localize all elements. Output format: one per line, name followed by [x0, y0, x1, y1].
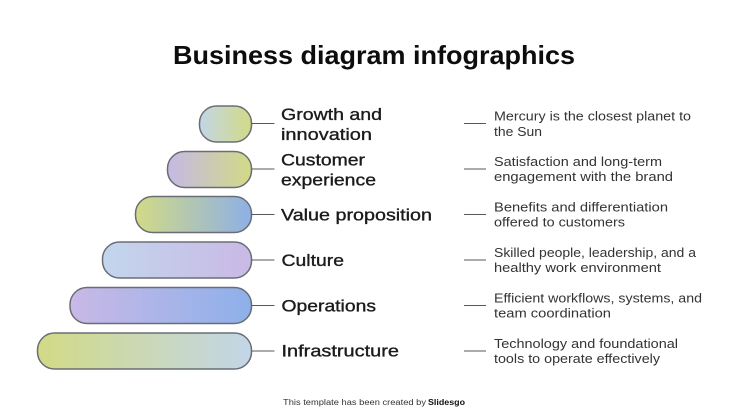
description: growth: Mercury is the closest planet to — [494, 109, 691, 124]
description: growth: the Sun — [494, 124, 542, 139]
label: customer experience: Customer — [281, 150, 365, 170]
connector: infrastructure label to description — [464, 350, 486, 352]
connector: infrastructure pill to label — [252, 350, 274, 352]
pill: culture — [102, 242, 252, 278]
connector: culture pill to label — [252, 259, 274, 261]
footer credit — [283, 398, 465, 407]
label: value proposition: Value proposition — [281, 206, 432, 224]
description: customer: Satisfaction and long-term — [494, 154, 662, 169]
pill: operations — [70, 288, 252, 324]
description: infrastructure: Technology and foundational — [494, 336, 678, 351]
label: customer experience — [281, 150, 376, 190]
title: Business diagram infographics — [173, 40, 575, 70]
pill: value proposition — [136, 196, 252, 232]
row: customer experience — [168, 150, 673, 190]
description: culture: Skilled people, leadership, and a — [494, 245, 697, 260]
connector: operations label to description — [464, 304, 486, 306]
description: culture: healthy work environment — [494, 260, 661, 275]
connector: growth pill to label — [252, 122, 274, 124]
footer credit: This template has been created by — [283, 398, 426, 407]
label: operations: Operations — [282, 296, 376, 315]
row: operations — [70, 288, 702, 324]
description: growth — [494, 109, 691, 139]
pill: growth and innovation — [200, 106, 252, 142]
row: infrastructure — [38, 333, 678, 369]
label: customer experience: experience — [281, 170, 376, 190]
description: operations: team coordination — [494, 305, 611, 320]
description: value: Benefits and differentiation — [494, 200, 668, 215]
description: value: offered to customers — [494, 215, 626, 230]
row: growth and innovation — [200, 105, 691, 144]
description: value — [494, 200, 668, 230]
description: operations: Efficient workflows, systems, and — [494, 290, 702, 305]
label: growth and innovation: innovation — [281, 125, 372, 144]
description: infrastructure: tools to operate effectively — [494, 351, 661, 366]
row: culture — [102, 242, 697, 278]
label: growth and innovation — [281, 105, 382, 144]
description: operations — [494, 290, 702, 320]
connector: operations pill to label — [252, 304, 274, 306]
connector: culture label to description — [464, 259, 486, 261]
description: culture — [494, 245, 697, 275]
connector: value pill to label — [252, 214, 274, 216]
connector: customer pill to label — [252, 168, 274, 170]
footer credit: Slidesgo — [428, 398, 465, 407]
connector: growth label to description — [464, 122, 486, 124]
label: culture: Culture — [282, 251, 344, 270]
description: customer — [494, 154, 673, 184]
connector: customer label to description — [464, 168, 486, 170]
label: growth and innovation: Growth and — [281, 105, 382, 124]
pill: customer experience — [168, 152, 252, 188]
description: infrastructure — [494, 336, 678, 366]
label: infrastructure: Infrastructure — [282, 342, 399, 361]
pill: infrastructure — [38, 333, 252, 369]
connector: value label to description — [464, 214, 486, 216]
description: customer: engagement with the brand — [494, 169, 673, 184]
row: value proposition — [136, 196, 668, 232]
